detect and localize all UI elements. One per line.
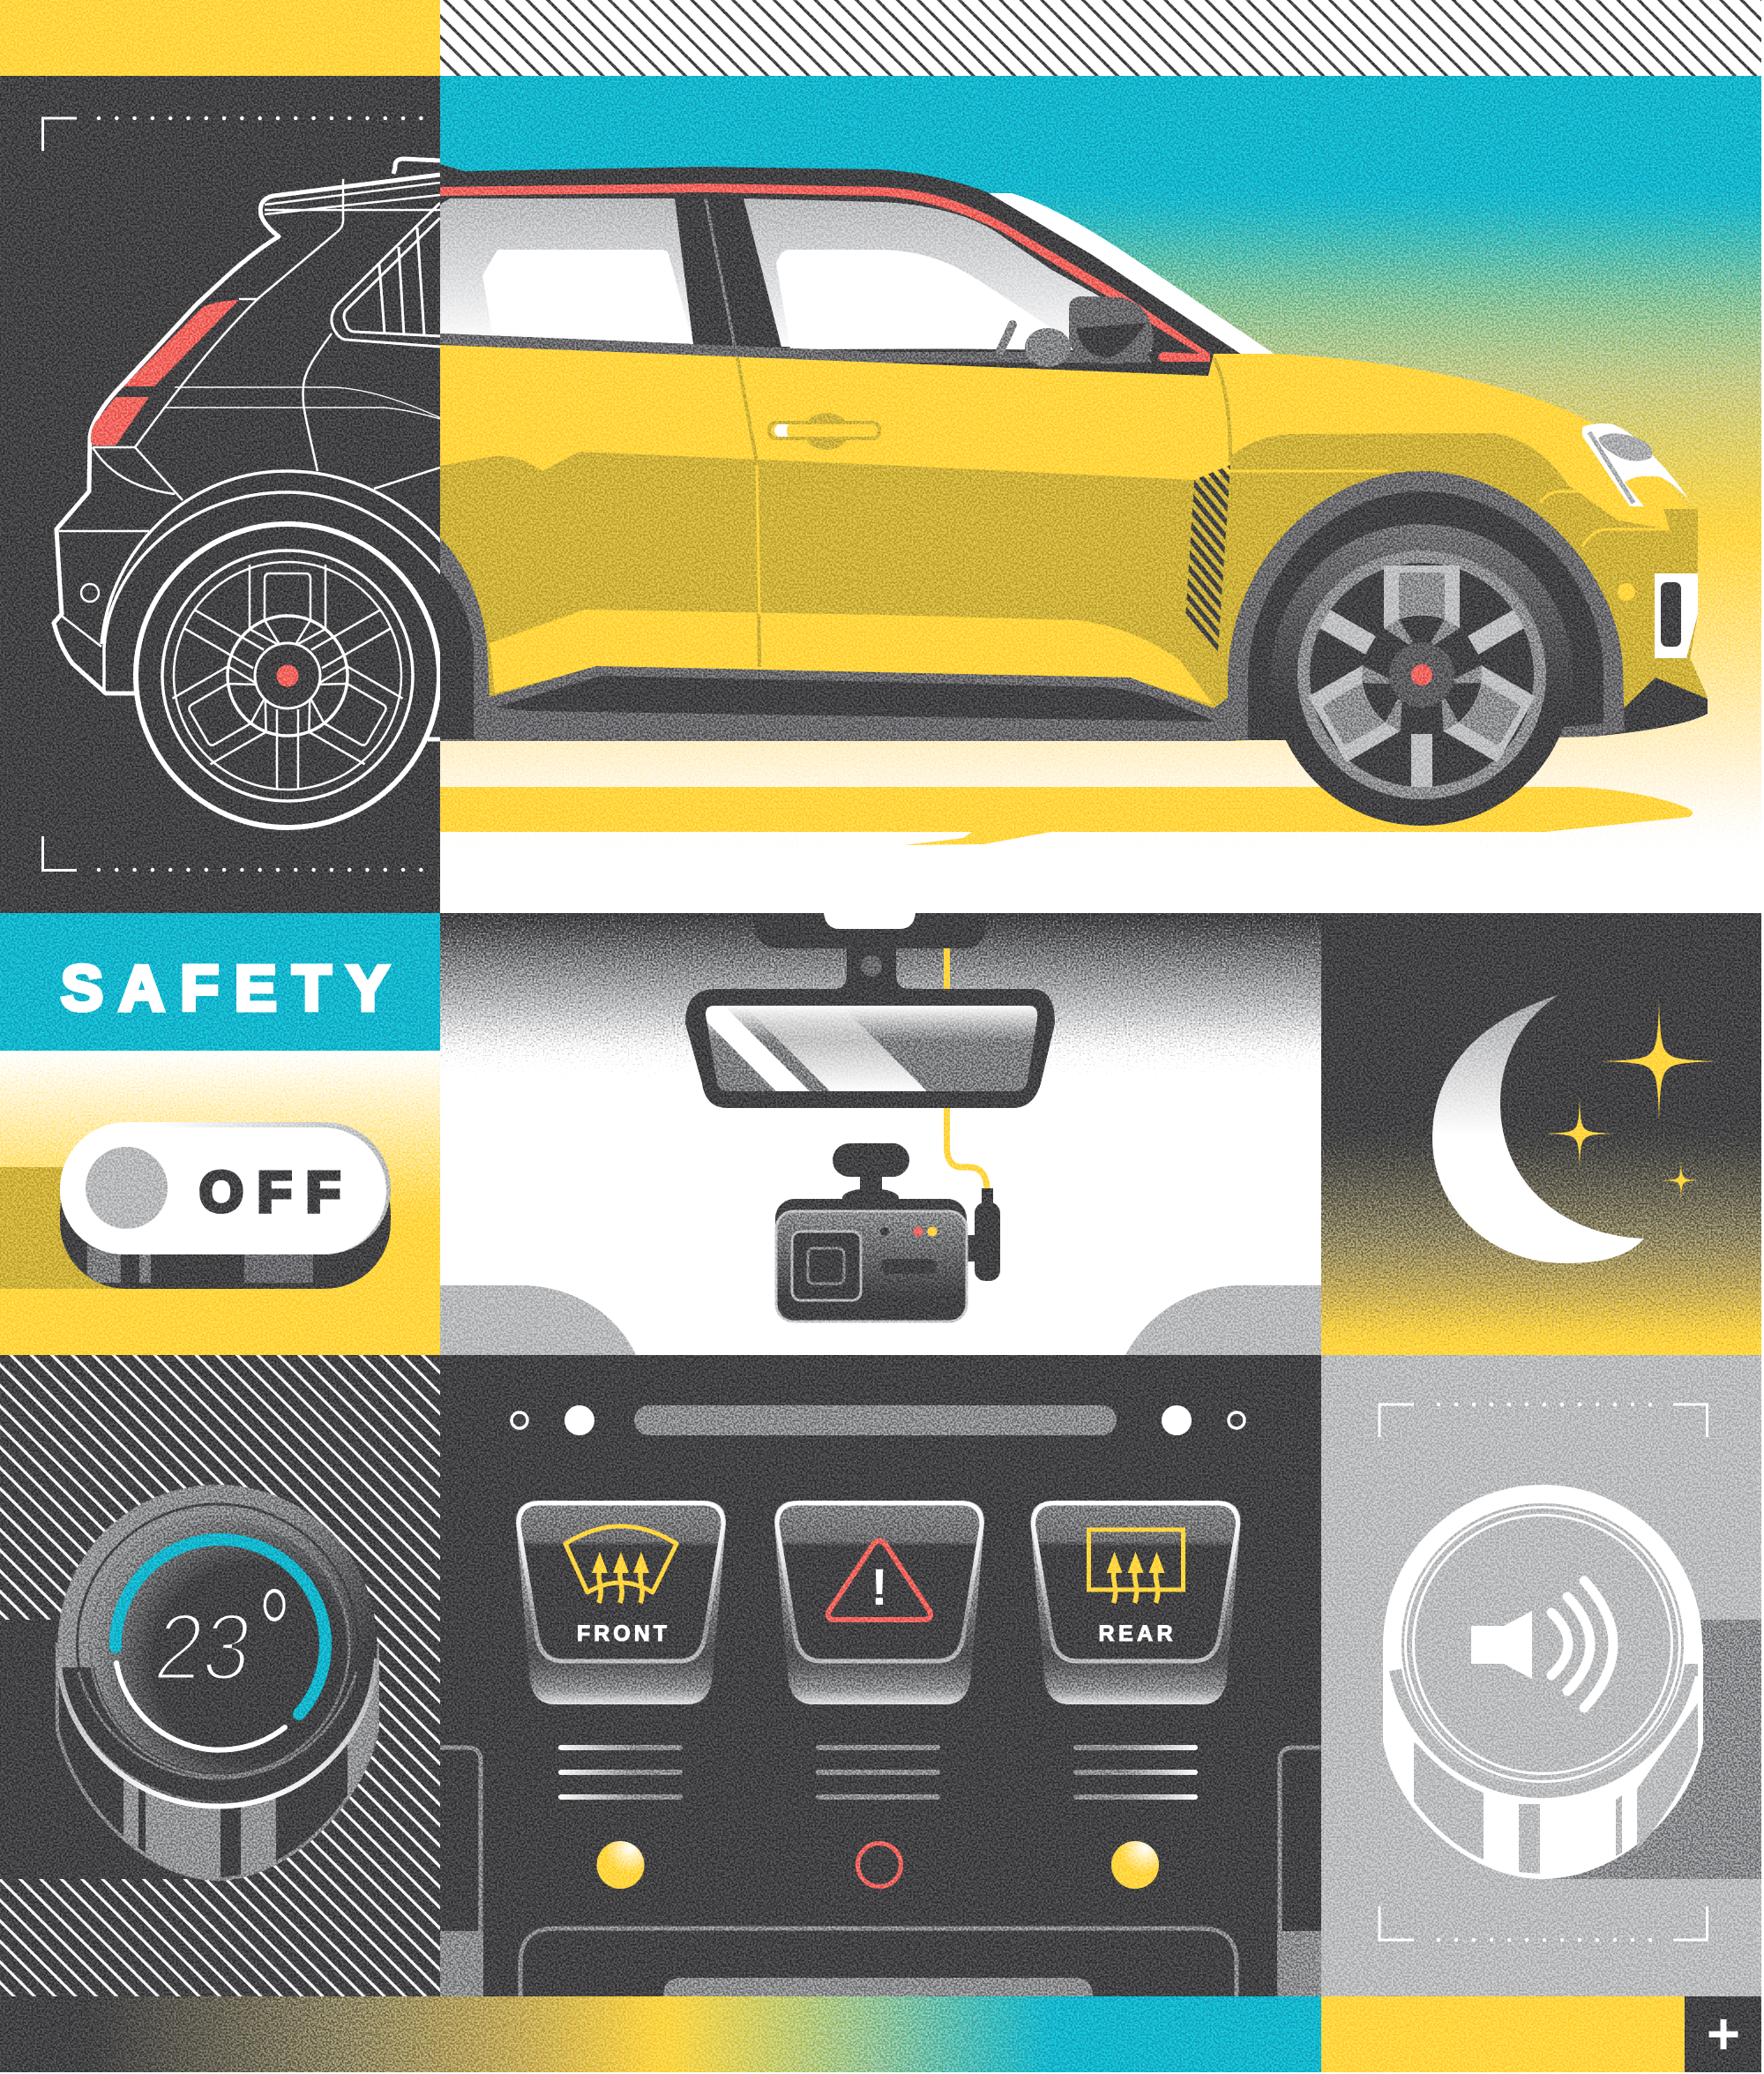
dashcam arm xyxy=(965,1235,977,1262)
dashboard top indicators xyxy=(512,1405,1245,1435)
windscreen white strip xyxy=(989,193,1275,355)
dashcam slot xyxy=(881,1259,937,1274)
dashcam neck dome xyxy=(842,1188,899,1208)
toggle label OFF: OFF xyxy=(199,1160,340,1224)
dashcam plug xyxy=(982,1188,993,1206)
button base xyxy=(516,1501,726,1704)
toggle base stripes xyxy=(87,1235,313,1283)
window sill xyxy=(440,333,1152,363)
footer dark corner xyxy=(1685,1996,1761,2072)
car body: colour half xyxy=(440,164,1708,826)
seat details xyxy=(1000,325,1013,351)
sill dark xyxy=(495,676,1215,722)
red roof stripe xyxy=(440,183,1210,362)
toggle rim xyxy=(60,1122,391,1254)
dashcam xyxy=(775,1143,1000,1322)
door seam on shade xyxy=(757,465,759,614)
front arch grey xyxy=(1228,471,1625,740)
panel: car gradient background xyxy=(440,76,1761,867)
icon: rear window heater xyxy=(1088,1530,1184,1603)
wireframe side body lines xyxy=(303,333,332,471)
teal temperature arc xyxy=(116,1539,325,1714)
toggle knob xyxy=(86,1147,168,1229)
wireframe sill stub xyxy=(428,738,440,741)
icon: plus xyxy=(1709,2019,1738,2049)
mirror frame xyxy=(685,989,1055,1108)
wireframe body outline xyxy=(54,159,440,693)
panel: volume background xyxy=(1321,1355,1761,1996)
rear arch grey xyxy=(440,538,496,741)
rear window reflection xyxy=(482,250,693,344)
thin spokes xyxy=(1319,610,1524,787)
front side window xyxy=(744,198,1152,351)
knob body xyxy=(1383,1644,1703,1879)
panel: night background gradient xyxy=(1270,882,1764,1411)
dashcam wire upper xyxy=(944,948,950,989)
button face xyxy=(1034,1503,1238,1661)
toggle switch xyxy=(60,1122,391,1289)
status light right xyxy=(1111,1841,1159,1889)
body yellow xyxy=(440,345,1708,741)
front lip spoiler xyxy=(1596,678,1708,736)
wireframe rear window xyxy=(332,203,440,347)
dashcam dot dark xyxy=(880,1227,889,1236)
door handle xyxy=(769,423,879,438)
door seam xyxy=(737,357,759,667)
footer yellow block xyxy=(1321,1996,1685,2072)
wing mirror xyxy=(1069,296,1154,363)
rim ring xyxy=(1297,550,1546,799)
lower body highlight xyxy=(490,610,1214,705)
front arch dark xyxy=(1248,491,1603,740)
icon: windscreen heater xyxy=(565,1526,676,1603)
label REAR: REAR xyxy=(1099,1621,1173,1646)
car rear: wireframe line art xyxy=(54,159,449,827)
icon: exclamation mark: ! xyxy=(871,1559,888,1616)
label FRONT: FRONT xyxy=(577,1621,667,1646)
shadow block behind volume knob xyxy=(1552,1620,1761,1879)
top band: diagonal stripes xyxy=(440,0,1761,76)
dashcam lens inner xyxy=(808,1248,844,1284)
button: rear demister xyxy=(1030,1501,1240,1704)
frame brackets: volume panel xyxy=(1379,1404,1708,1940)
knob body panels xyxy=(1414,1703,1698,1874)
knob face xyxy=(1383,1485,1702,1804)
status bar xyxy=(634,1405,1117,1435)
fender seam xyxy=(1214,358,1230,462)
status light middle xyxy=(857,1844,901,1886)
button face xyxy=(519,1503,723,1661)
hub centre xyxy=(1411,664,1432,685)
mirror mount white cap xyxy=(824,913,916,929)
indicator dot left xyxy=(564,1405,594,1435)
dashcam face xyxy=(776,1211,967,1322)
frame brackets: wireframe panel xyxy=(42,118,423,870)
dashcam connector xyxy=(975,1202,1000,1281)
dashcam back body xyxy=(775,1199,967,1287)
panel: dashboard controls xyxy=(440,1355,1321,1996)
vent lines right xyxy=(1073,1745,1198,1800)
front light white block xyxy=(1655,573,1698,658)
temperature readout: 23 xyxy=(149,1593,259,1700)
tyre xyxy=(1271,524,1573,826)
temperature readout xyxy=(149,1561,291,1703)
panel: toggle background gradient xyxy=(0,997,494,1411)
windscreen corner right xyxy=(1125,1285,1321,1355)
knob rings xyxy=(1401,1503,1684,1786)
indicator ring right xyxy=(1229,1412,1245,1428)
fog lamp xyxy=(1618,583,1635,601)
wide spokes xyxy=(1308,565,1536,762)
fender vent hatch xyxy=(1182,459,1235,657)
button base xyxy=(774,1501,984,1704)
mirror glass xyxy=(691,997,1050,1103)
footer gradient band xyxy=(0,1941,1376,2074)
toggle face xyxy=(60,1127,386,1254)
heading: SAFETY: SAFETY xyxy=(61,954,389,1024)
dashcam dot red xyxy=(914,1226,923,1237)
knob lower crescent xyxy=(1395,1670,1698,1792)
mirror mount dark xyxy=(754,913,986,989)
indicator dot right xyxy=(1162,1405,1192,1435)
panel: striped temperature background xyxy=(0,1355,440,1996)
headlight detail xyxy=(1589,432,1650,503)
top band: yellow xyxy=(0,0,440,76)
front wheel xyxy=(1271,524,1573,826)
dashcam neck xyxy=(860,1173,882,1195)
dashcam lens outer xyxy=(792,1232,861,1300)
wireframe bumper sensor xyxy=(81,584,99,602)
door handle highlight xyxy=(774,424,789,437)
panel: wireframe rear background xyxy=(0,76,440,913)
rear-view mirror xyxy=(685,913,1055,1191)
dial face lower dark xyxy=(60,1667,375,1801)
windscreen corner left xyxy=(440,1285,636,1355)
status light left xyxy=(596,1841,644,1889)
temperature dial xyxy=(57,1485,379,1888)
button base xyxy=(1030,1501,1240,1704)
dial inner ring xyxy=(90,1516,349,1776)
lower tray outline xyxy=(520,1928,1237,1996)
icon: crescent moon xyxy=(1432,995,1644,1263)
lower tray pill xyxy=(663,1978,1093,1996)
headrest xyxy=(1025,328,1071,367)
mount screw xyxy=(861,955,882,977)
headlight xyxy=(1582,423,1689,506)
dashcam top knob xyxy=(833,1143,909,1177)
dial rim highlight xyxy=(58,1658,377,1807)
icon: warning triangle xyxy=(828,1540,931,1620)
wireframe wheel arches xyxy=(101,471,441,644)
panel: SAFETY label background xyxy=(0,913,440,1051)
dial lower rings xyxy=(78,1672,356,1778)
button: front demister xyxy=(516,1501,726,1704)
dashcam dot yellow xyxy=(928,1226,937,1237)
roof and pillars dark xyxy=(440,164,1244,379)
dial groove xyxy=(78,1504,358,1785)
rear side window xyxy=(440,198,693,344)
ground shadow xyxy=(440,787,1693,845)
front light slot xyxy=(1661,582,1681,647)
dashcam wire lower xyxy=(947,1108,987,1191)
icon: speaker xyxy=(1471,1581,1613,1708)
door handle recess xyxy=(804,413,849,450)
volume knob xyxy=(1383,1485,1703,1879)
wireframe wheel xyxy=(136,524,439,827)
door gap on pillar xyxy=(706,198,736,355)
hub xyxy=(1389,642,1454,708)
rear arch dark xyxy=(440,571,474,739)
button face xyxy=(777,1503,982,1661)
dial inner disc xyxy=(93,1519,347,1773)
wireframe spoiler and pillar lines xyxy=(59,179,440,647)
side bracket right xyxy=(1277,1748,1321,1996)
dial face xyxy=(58,1485,377,1804)
toggle shadow block xyxy=(0,1167,132,1289)
vent lines middle xyxy=(816,1745,940,1800)
icon: stars xyxy=(1544,1001,1719,1202)
rim interior xyxy=(1310,563,1534,787)
wing mirror lower xyxy=(1076,323,1147,358)
dial body stripes xyxy=(123,1658,379,1888)
dial body xyxy=(57,1644,377,1879)
body lower shade xyxy=(440,433,1708,741)
temperature readout: ° xyxy=(258,1561,291,1703)
bumper crease lines xyxy=(1230,471,1670,547)
panel: mirror background gradient xyxy=(388,865,1376,1411)
wireframe rear lights xyxy=(91,300,239,445)
front window reflection xyxy=(776,250,1067,349)
button: hazard xyxy=(774,1501,984,1704)
white temperature arc xyxy=(116,1663,285,1750)
sill grey xyxy=(440,666,1235,741)
side bracket left xyxy=(440,1748,483,1996)
toggle base xyxy=(60,1147,391,1289)
indicator ring left xyxy=(512,1412,527,1428)
dark block behind temperature knob xyxy=(0,1620,220,1879)
vent lines left xyxy=(558,1745,683,1800)
